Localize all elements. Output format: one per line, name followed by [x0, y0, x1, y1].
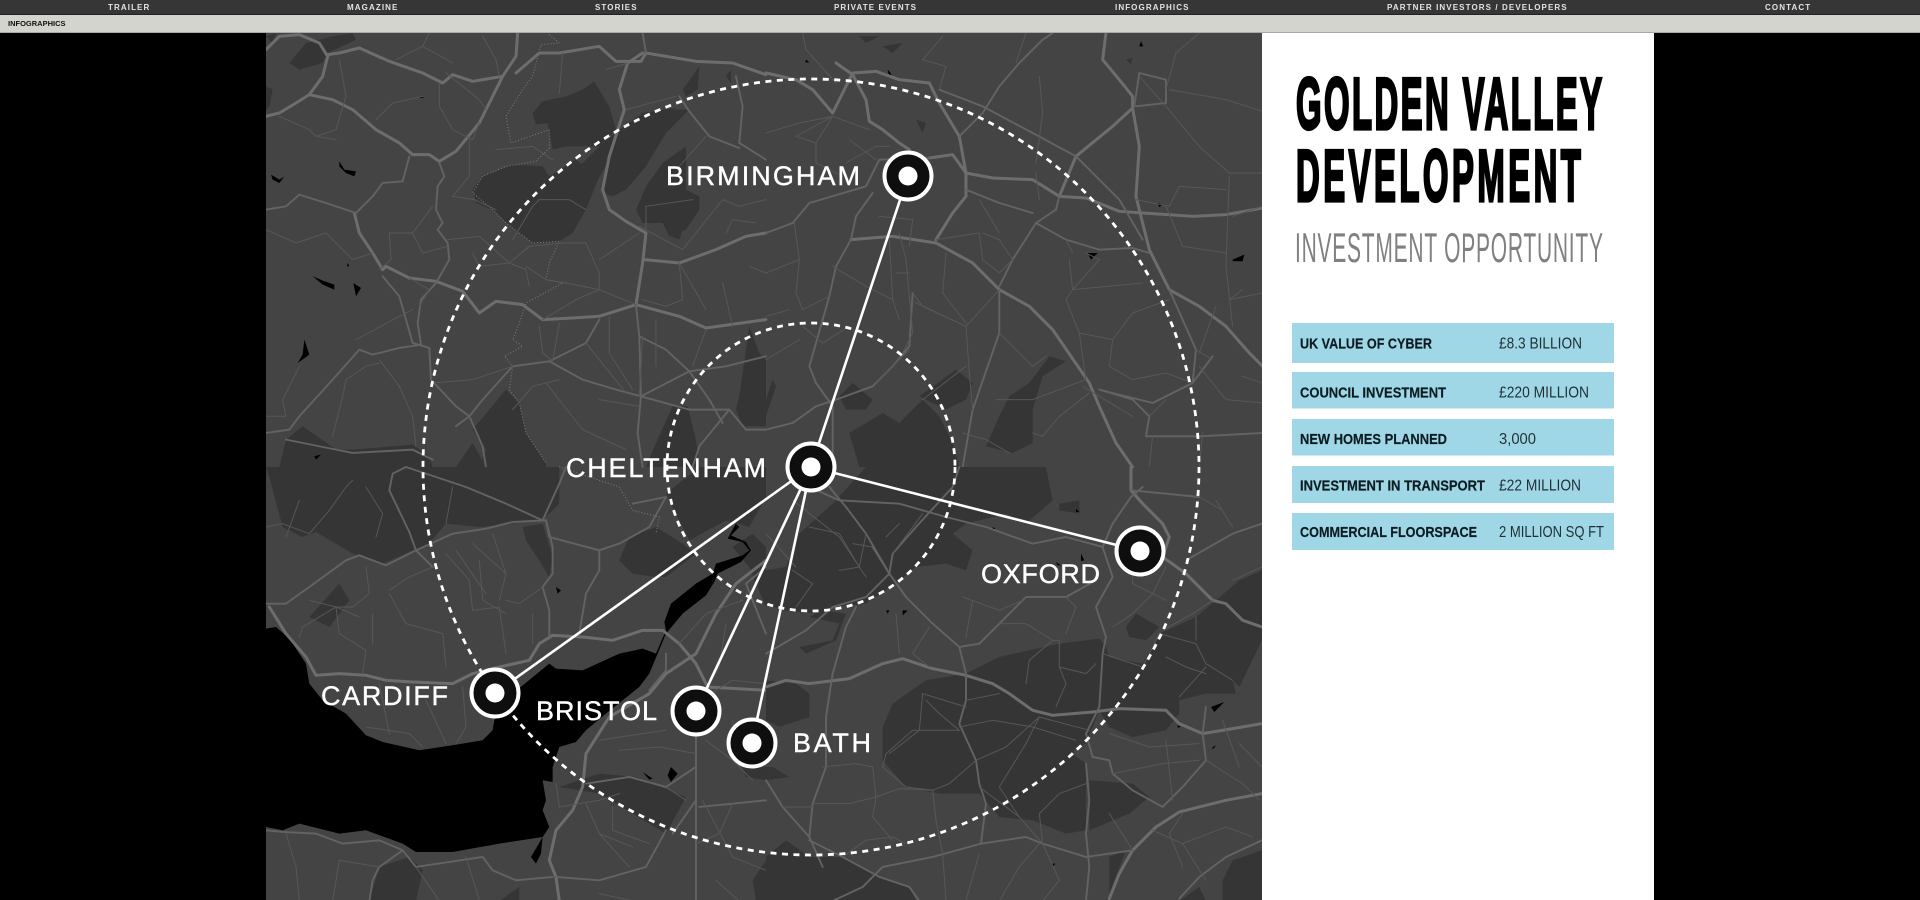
marker: Bath — [728, 720, 776, 766]
breadcrumb bar: INFOGRAPHICS — [8, 19, 66, 28]
row: commercial floorspace: COMMERCIAL FLOORSPACE — [1300, 524, 1477, 541]
row: UK value of cyber: UK VALUE OF CYBER — [1300, 336, 1432, 352]
row: council investment: £220 MILLION — [1499, 384, 1589, 402]
stats table — [1292, 323, 1614, 550]
water: Bristol Channel and Severn estuary — [266, 524, 751, 864]
row: investment in transport — [1292, 466, 1614, 503]
row: council investment — [1292, 372, 1614, 408]
row: new homes planned: NEW HOMES PLANNED — [1300, 431, 1447, 448]
navigation bar: PRIVATE EVENTS — [834, 3, 917, 12]
panel: information background — [1262, 33, 1654, 900]
navigation bar: STORIES — [595, 3, 638, 12]
navigation bar — [0, 0, 1920, 15]
row: commercial floorspace — [1292, 513, 1614, 550]
outer dashed radius circle — [423, 79, 1199, 855]
title — [1296, 63, 1602, 216]
row: new homes planned — [1292, 419, 1614, 456]
label: Bath: BATH — [793, 728, 871, 758]
marker: Cardiff — [472, 670, 518, 716]
row: commercial floorspace: 2 MILLION SQ FT — [1499, 524, 1604, 541]
label: Oxford: OXFORD — [981, 559, 1100, 589]
marker: Cheltenham — [788, 444, 834, 490]
row: UK value of cyber: £8.3 BILLION — [1499, 336, 1582, 352]
navigation bar: INFOGRAPHICS — [1115, 3, 1190, 12]
navigation bar: TRAILER — [108, 3, 150, 12]
marker: Oxford — [1116, 528, 1164, 574]
title: GOLDEN VALLEY — [1296, 63, 1602, 144]
breadcrumb bar — [0, 15, 1920, 33]
label: Bristol: BRISTOL — [536, 696, 657, 726]
marker: Birmingham — [884, 152, 932, 200]
marker: Bristol — [672, 688, 720, 734]
navigation bar: PARTNER INVESTORS / DEVELOPERS — [1387, 3, 1568, 12]
row: council investment: COUNCIL INVESTMENT — [1300, 384, 1446, 402]
label: Cardiff: CARDIFF — [321, 681, 448, 711]
navigation bar: CONTACT — [1765, 3, 1811, 12]
inner dashed radius circle — [667, 323, 955, 611]
row: investment in transport: £22 MILLION — [1499, 478, 1581, 494]
label: Cheltenham: CHELTENHAM — [566, 453, 766, 483]
label: Birmingham: BIRMINGHAM — [666, 161, 860, 191]
map of south west England and south Wales — [266, 33, 1263, 900]
row: UK value of cyber — [1292, 323, 1614, 363]
subtitle: INVESTMENT OPPORTUNITY — [1295, 225, 1603, 272]
navigation bar: MAGAZINE — [347, 3, 398, 12]
row: investment in transport: INVESTMENT IN TRANSPORT — [1300, 478, 1485, 494]
title: DEVELOPMENT — [1296, 135, 1581, 216]
connector lines from Cheltenham — [495, 176, 1140, 743]
row: new homes planned: 3,000 — [1499, 431, 1536, 448]
